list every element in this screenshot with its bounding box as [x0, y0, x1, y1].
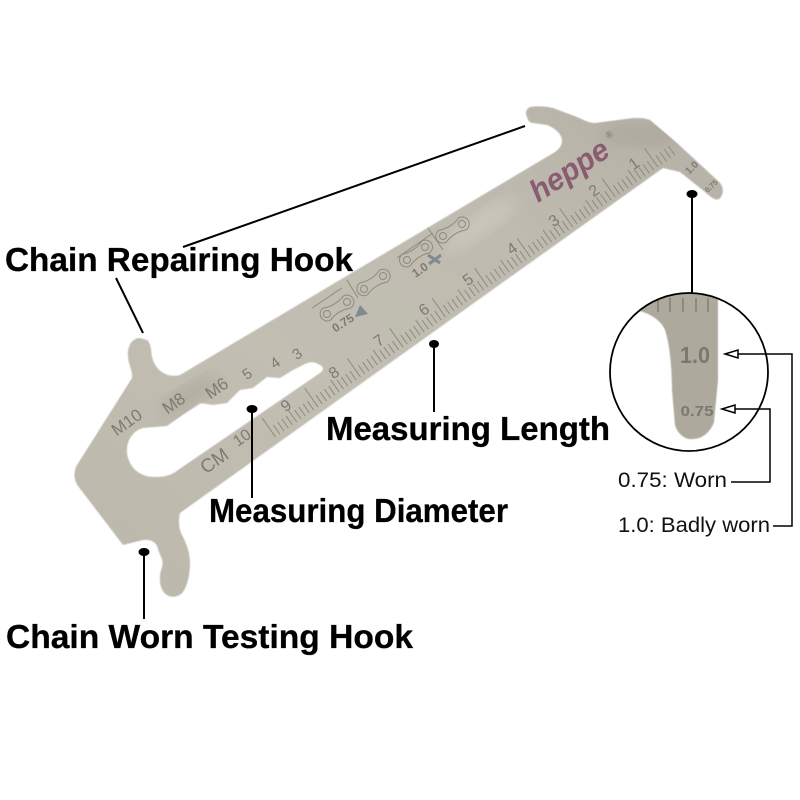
magnified tip shape — [640, 294, 718, 440]
magnified ticks — [658, 298, 708, 312]
magnified 0.75 mark: 0.75 — [680, 403, 714, 420]
diameter scale labels: 4 — [267, 354, 284, 373]
brand logo: heppe — [523, 132, 616, 209]
arrow: 0.75 callout — [722, 405, 770, 482]
chain diagram 1.0 — [397, 214, 472, 281]
lens ring — [610, 293, 768, 451]
ruler numbers: 7 — [371, 332, 388, 351]
leader: chain worn testing hook — [138, 548, 150, 619]
worn marks on tip — [683, 159, 720, 195]
ruler numbers: 9 — [278, 397, 295, 416]
ruler numbers — [197, 155, 643, 479]
chain diagram 0.75: 0.75 — [329, 311, 357, 335]
heading: chain worn testing hook: Chain Worn Testing Hook — [6, 618, 414, 655]
surface shading — [155, 123, 680, 437]
magnified 1.0 mark: 1.0 — [680, 342, 710, 368]
heading: chain repairing hook: Chain Repairing Hook — [5, 241, 354, 278]
caption: 0.75 worn: 0.75: Worn — [618, 468, 727, 492]
diameter scale labels: M10 — [108, 405, 146, 440]
heading: measuring length: Measuring Length — [326, 410, 610, 447]
chain checker tool — [74, 106, 723, 597]
ruler ticks — [262, 136, 675, 437]
worn marks on tip: 0.75 — [703, 178, 720, 195]
leader: magnified tip — [686, 190, 698, 293]
ruler numbers: 2 — [586, 182, 603, 201]
ruler numbers: 6 — [416, 301, 433, 320]
diameter scale labels: M6 — [202, 374, 232, 403]
chain diagram 0.75 — [312, 267, 393, 335]
arrow: 1.0 callout — [725, 350, 792, 526]
diameter scale labels: 5 — [239, 365, 256, 384]
ruler numbers: 1 — [626, 155, 643, 174]
ruler numbers: 10 — [230, 426, 255, 450]
ruler numbers: 8 — [326, 364, 343, 383]
diameter scale labels — [108, 345, 306, 440]
worn marks on tip: 1.0 — [683, 159, 701, 177]
magnified view of wear tip — [610, 280, 768, 451]
tool body — [74, 106, 723, 597]
ruler numbers: 3 — [546, 212, 563, 231]
ruler numbers: 4 — [504, 240, 521, 259]
leader: measuring length — [429, 340, 439, 412]
heading: measuring diameter: Measuring Diameter — [209, 492, 508, 529]
diameter scale labels: 3 — [289, 345, 306, 364]
ruler numbers: 5 — [460, 271, 477, 290]
leader: measuring diameter — [246, 405, 258, 498]
brand logo: ® — [604, 128, 615, 141]
diameter scale labels: M8 — [159, 389, 189, 418]
ruler numbers: CM — [197, 444, 233, 479]
chain diagram 1.0: 1.0 — [409, 259, 431, 281]
leader: chain repairing hook — [116, 126, 525, 333]
caption: 1.0 badly worn: 1.0: Badly worn — [618, 513, 770, 537]
